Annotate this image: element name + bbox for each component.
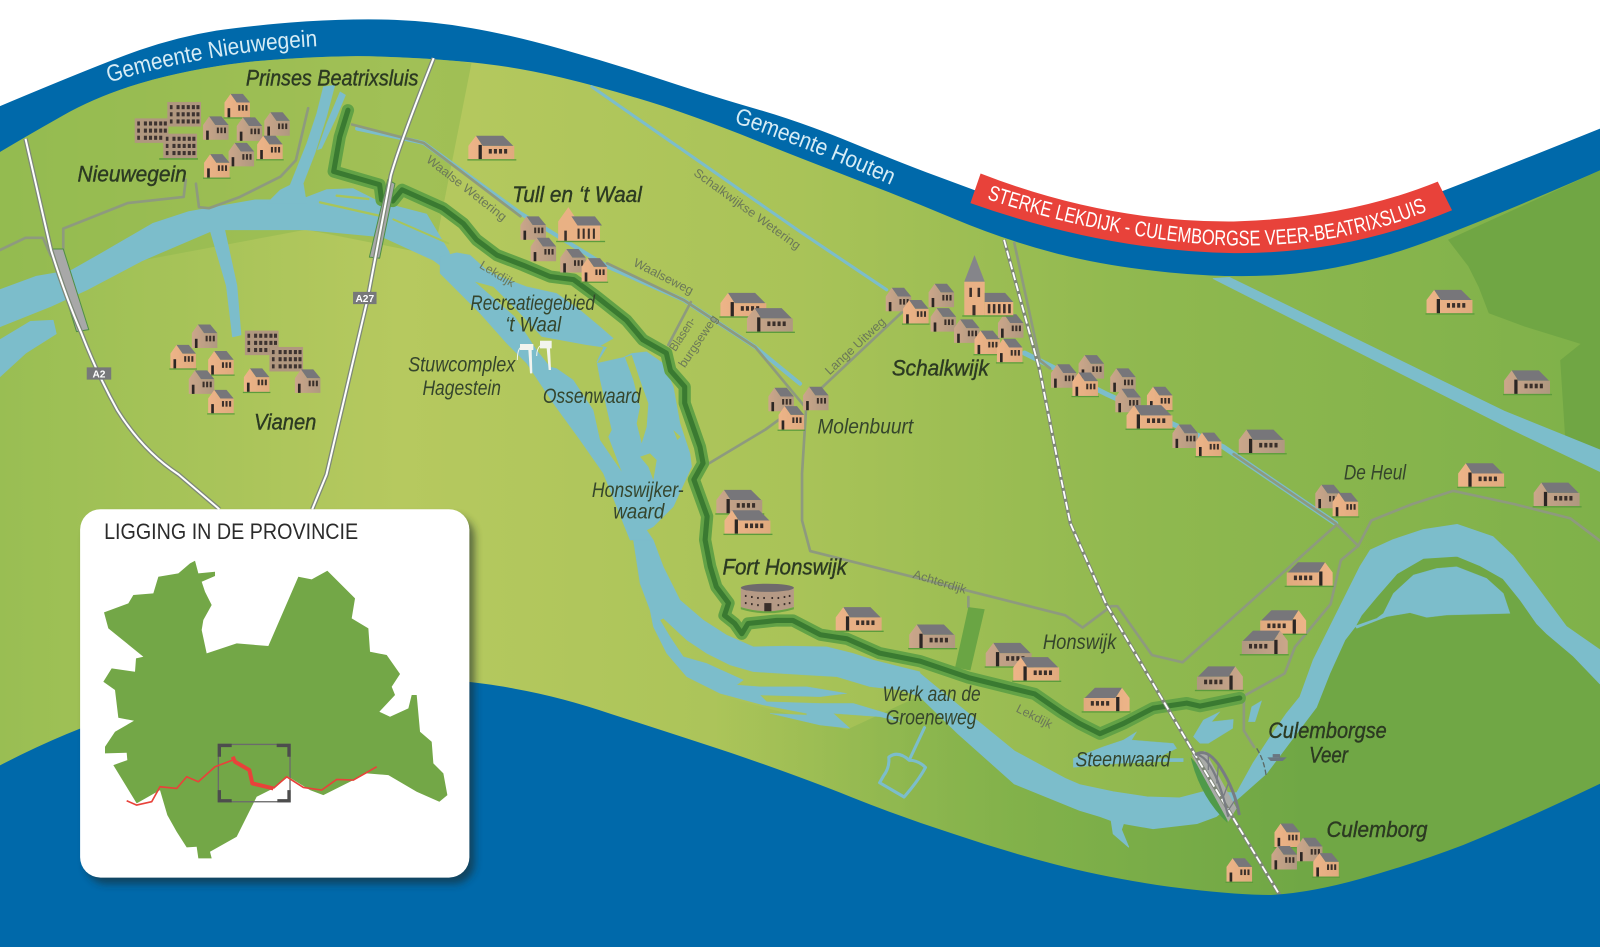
labels: roads and waterways: Achterdijk [911, 567, 969, 597]
labels: places bold: Tull en ‘t Waal [512, 182, 643, 207]
church: Tull en 't Waal [556, 207, 605, 242]
highway A2 [26, 139, 219, 509]
labels: places bold: Schalkwijk [892, 356, 990, 381]
houses: row along the east canal [1051, 355, 1287, 457]
labels: roads and waterways: Lekdijk [477, 258, 518, 290]
panel: ligging in de provincie [80, 509, 474, 884]
bottom blue band [0, 674, 1600, 947]
houses: Nieuwegein [135, 94, 290, 179]
farms: east road, mirrored [1082, 562, 1334, 713]
icon: Stuwcomplex Hagestein weirs [517, 341, 552, 373]
labels: places bold: Veer [1309, 742, 1349, 767]
railway [1004, 240, 1280, 895]
labels: places bold: Nieuwegein [78, 162, 187, 187]
labels: places regular: Werk aan de [883, 682, 981, 706]
water: Steenwaard ponds [1073, 701, 1262, 767]
labels: places regular: Ossenwaard [543, 384, 642, 408]
water: moat Werk aan de Groeneweg [880, 728, 926, 797]
canals [357, 87, 1600, 524]
labels: places regular: Honswijk [1043, 630, 1117, 654]
farms: Honswijkerwaard [715, 490, 772, 535]
ferry route [1257, 748, 1266, 775]
dark green zone, north east [1448, 170, 1600, 457]
labels: places regular: Steenwaard [1076, 747, 1171, 771]
labels: roads and waterways: Blasen- [666, 314, 699, 354]
houses: Vianen [169, 325, 320, 415]
water: main river and loop at Culemborg [917, 525, 1600, 847]
labels: places bold: Prinses Beatrixsluis [246, 66, 418, 91]
labels: roads and waterways [424, 153, 1056, 732]
farm near Tull [467, 136, 516, 161]
dark green zone, south of the river [653, 536, 1600, 918]
labels: places regular: Molenbuurt [817, 415, 914, 439]
sign A27 [353, 292, 377, 305]
icon: ferry [1267, 754, 1287, 761]
label: Gemeente Houten: Gemeente Houten [736, 109, 894, 184]
farms: along the dike [835, 607, 1061, 682]
houses: Culemborg [1226, 824, 1340, 883]
label: Gemeente Nieuwegein: Gemeente Nieuwegein [107, 30, 316, 81]
labels: places bold [78, 66, 1428, 842]
labels: places bold: Fort Honswijk [722, 555, 849, 580]
water: branches at Fort Honswijk [633, 540, 920, 728]
church: Schalkwijk [962, 255, 1013, 317]
water: sluice channel [267, 85, 448, 243]
railway bridge deck [1191, 751, 1237, 823]
labels: places regular: Recreatiegebied [470, 291, 596, 315]
labels: places regular: Groeneweg [886, 706, 977, 730]
labels: places regular: Hagestein [422, 376, 501, 400]
labels: roads and waterways: Waalseweg [631, 256, 696, 298]
highway A27 [312, 58, 434, 509]
labels: places bold: Culemborgse [1268, 718, 1387, 743]
labels: roads and waterways: burgseweg [676, 312, 721, 370]
labels: places regular: De Heul [1344, 461, 1407, 485]
panel heading: LIGGING IN DE PROVINCIE [104, 519, 358, 544]
labels: places regular: Stuwcomplex [408, 352, 516, 376]
labels: places regular [408, 291, 1407, 771]
red dike line [127, 760, 233, 805]
dike route: Sterke Lekdijk [334, 110, 1240, 734]
labels: places regular: waard [613, 499, 665, 523]
labels: places regular: ‘t Waal [505, 313, 562, 337]
map: province Utrecht [103, 561, 447, 858]
locator frame [218, 744, 290, 802]
farms: east side [1426, 290, 1582, 507]
labels: places regular: Honswijker- [592, 478, 684, 502]
roads [0, 108, 1600, 747]
label: banner title: STERKE LEKDIJK - CULEMBORGSE VEER-BEATRIXSLUIS [988, 186, 1426, 246]
houses: Schalkwijk [886, 255, 1023, 363]
water: Recreatiegebied, Ossenwaard and Honswijkerwaard [440, 253, 692, 540]
labels: places bold: Culemborg [1327, 817, 1428, 842]
labels: roads and waterways: Waalse Wetering [424, 153, 510, 224]
labels: places bold: Vianen [254, 410, 316, 435]
labels: roads and waterways: Schalkwijkse Wetering [691, 166, 803, 253]
darker polder north of the river [0, 56, 471, 327]
labels: roads and waterways: Lekdijk [1014, 701, 1056, 732]
sign A2 [87, 367, 111, 381]
houses: Tull en 't Waal [520, 207, 608, 283]
icon: Fort Honswijk [741, 584, 794, 613]
railway bridge arches [1195, 753, 1239, 817]
houses: Molenbuurt [768, 387, 829, 431]
sign A2: A2 [92, 370, 106, 381]
labels: roads and waterways: Lange Uitweg [822, 314, 888, 378]
farms at Blasenburgseweg [719, 293, 795, 333]
sign A27: A27 [355, 294, 374, 305]
blue boundary band [0, 19, 1600, 306]
green patch at Achterdijk [955, 607, 985, 670]
red banner [970, 173, 1452, 253]
water: oxbow lake [1355, 567, 1510, 628]
houses: De Heul [1315, 485, 1359, 518]
